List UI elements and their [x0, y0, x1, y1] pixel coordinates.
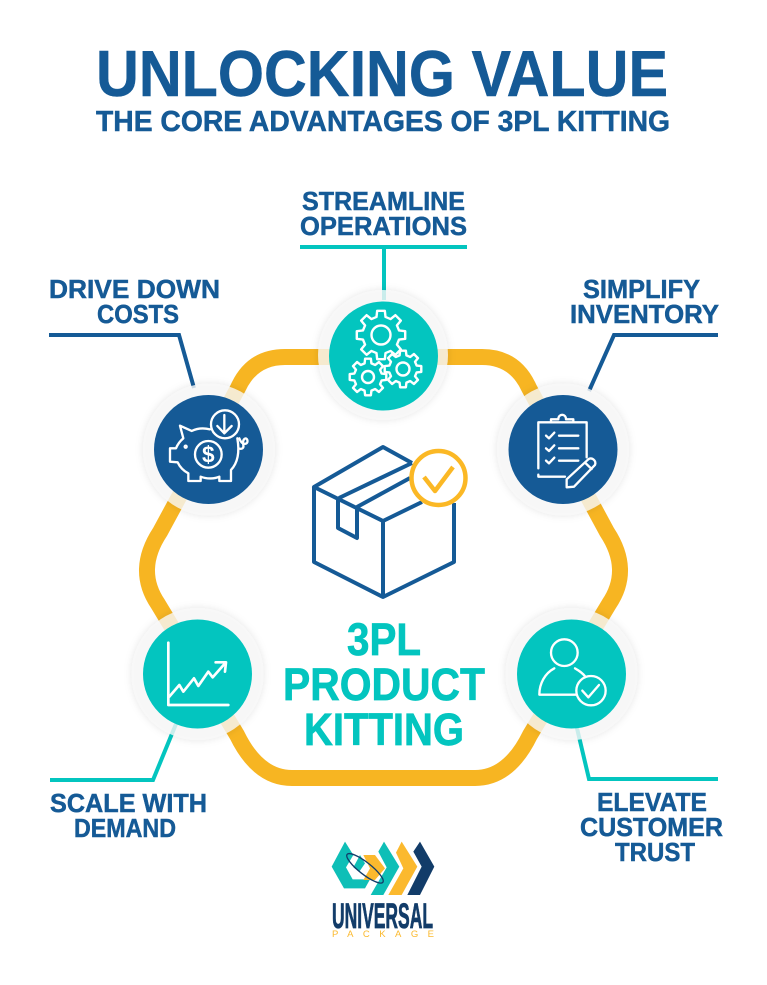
label: streamline operations: STREAMLINE — [302, 186, 465, 216]
label: drive down costs: DRIVE DOWN — [49, 274, 220, 304]
center heading: KITTING — [304, 704, 464, 755]
center heading — [283, 614, 485, 755]
node: drive down costs icon — [143, 384, 275, 516]
title: UNLOCKING VALUE — [96, 37, 668, 110]
node: elevate customer trust icon — [506, 608, 638, 740]
icon: person with check — [539, 639, 606, 705]
center heading: 3PL — [347, 614, 421, 665]
icon: piggy bank: $ — [202, 441, 215, 467]
label: scale with demand — [50, 788, 207, 843]
logo: Universal Package: UNIVERSAL — [332, 897, 433, 936]
icon: box with check — [314, 447, 466, 597]
leader lines — [49, 247, 718, 780]
label: streamline operations: OPERATIONS — [300, 211, 467, 241]
icon: clipboard and pencil — [538, 415, 595, 487]
logo: Universal Package — [332, 842, 434, 940]
icon: growth chart — [168, 643, 228, 705]
label: drive down costs — [49, 274, 220, 329]
label: elevate customer trust — [580, 787, 723, 867]
label: elevate customer trust: ELEVATE — [597, 787, 707, 817]
label: drive down costs: COSTS — [97, 299, 179, 329]
title: THE CORE ADVANTAGES OF 3PL KITTING — [96, 106, 670, 138]
label: simplify inventory: INVENTORY — [570, 299, 719, 329]
label: streamline operations — [300, 186, 467, 241]
connector ring: yellow rounded hexagon — [147, 357, 620, 778]
logo mark — [332, 842, 434, 895]
node: scale with demand icon — [132, 608, 264, 740]
title — [96, 37, 670, 138]
icon: gears — [350, 311, 421, 395]
node: simplify inventory icon — [497, 384, 629, 516]
label: scale with demand: SCALE WITH — [50, 788, 207, 818]
label: elevate customer trust: TRUST — [615, 837, 695, 867]
logo: Universal Package: PACKAGE — [332, 929, 434, 940]
node: streamline operations icon — [318, 290, 448, 420]
label: scale with demand: DEMAND — [74, 813, 176, 843]
label: simplify inventory — [570, 274, 719, 329]
label: simplify inventory: SIMPLIFY — [583, 274, 700, 304]
label: elevate customer trust: CUSTOMER — [580, 812, 723, 842]
center heading: PRODUCT — [283, 659, 485, 710]
